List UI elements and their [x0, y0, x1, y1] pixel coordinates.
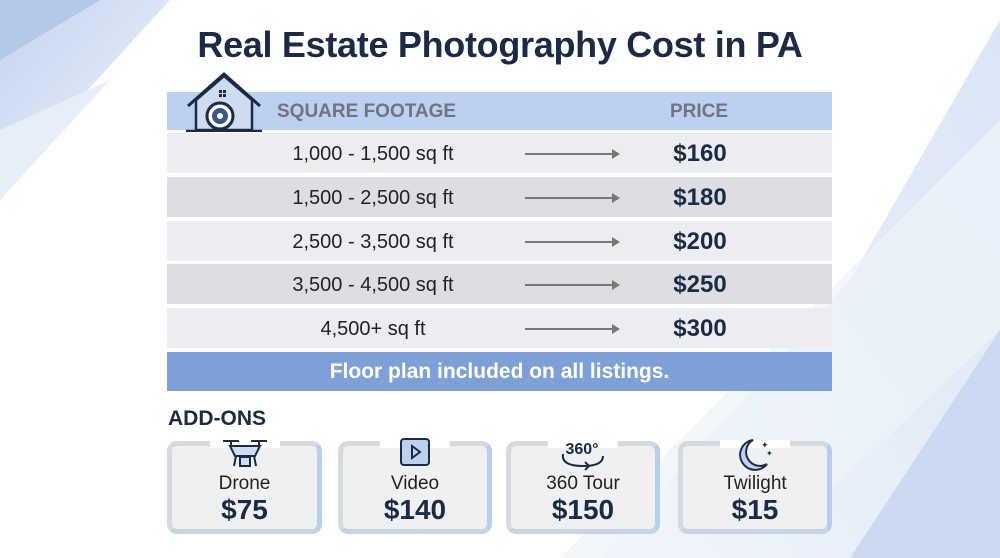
add-ons heading: ADD-ONS: [168, 407, 266, 430]
row 1: [167, 133, 832, 173]
icon: 360: 360°: [565, 441, 599, 458]
icon: moon: [739, 439, 773, 471]
table header: PRICE: [670, 101, 728, 122]
card: twilight: Twilight: [723, 473, 787, 494]
table header: SQUARE FOOTAGE: [277, 101, 456, 122]
icon: moon: ✦: [766, 449, 773, 458]
icon: house camera: [186, 72, 262, 132]
card: twilight: $15: [732, 494, 778, 525]
row 2: $180: [673, 184, 727, 211]
row 5: $300: [673, 315, 727, 342]
table header: [167, 92, 832, 130]
row 5: [167, 308, 832, 348]
icon: 360: [562, 441, 604, 471]
footer note: Floor plan included on all listings.: [330, 360, 669, 383]
footer note: [167, 352, 832, 391]
row 1: 1,000 - 1,500 sq ft: [292, 143, 454, 165]
card: 360 tour: 360 Tour: [546, 473, 620, 494]
card: twilight: [678, 441, 832, 534]
card: video: [338, 441, 492, 534]
icon: video: [400, 438, 430, 466]
row 3: 2,500 - 3,500 sq ft: [292, 231, 454, 253]
row 1: $160: [673, 140, 727, 167]
card: video: Video: [391, 473, 439, 494]
card: 360 tour: [506, 441, 660, 534]
icon: drone: [223, 440, 267, 467]
card: drone: [167, 441, 322, 534]
icon: moon: ✦: [761, 440, 769, 450]
row 2: [167, 177, 832, 217]
row 4: $250: [673, 271, 727, 298]
row 4: [167, 264, 832, 304]
title: Real Estate Photography Cost in PA: [197, 24, 803, 65]
card: video: $140: [384, 494, 446, 525]
row 5: 4,500+ sq ft: [320, 318, 426, 340]
card: 360 tour: $150: [552, 494, 614, 525]
card: drone: $75: [221, 494, 268, 525]
row 3: [167, 221, 832, 261]
card: drone: Drone: [219, 473, 270, 494]
row 4: 3,500 - 4,500 sq ft: [292, 274, 454, 296]
row 2: 1,500 - 2,500 sq ft: [292, 187, 454, 209]
row 3: $200: [673, 228, 727, 255]
